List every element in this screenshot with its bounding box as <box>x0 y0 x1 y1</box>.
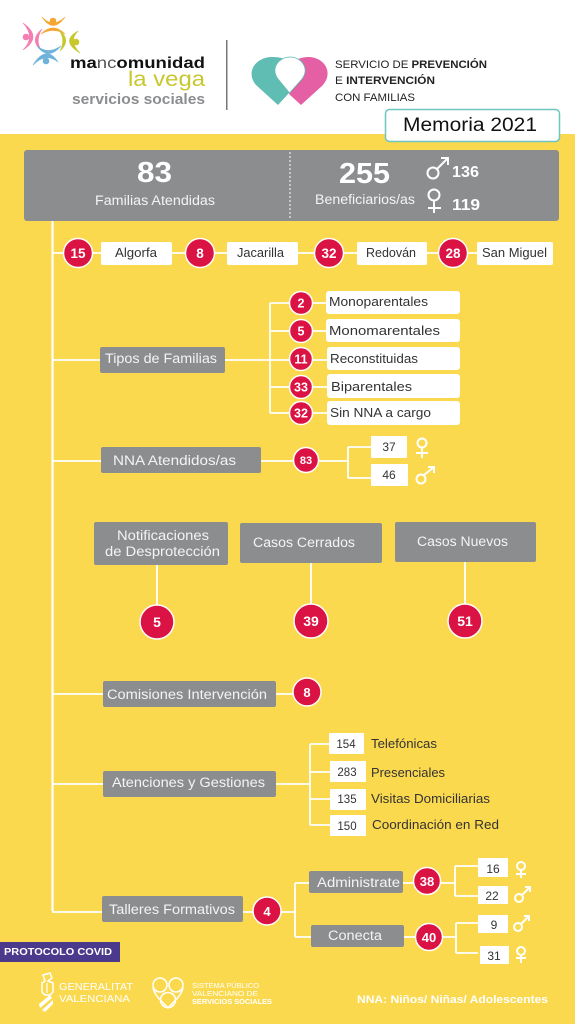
Redovan: 32 <box>321 246 337 261</box>
Sin NNA a cargo: Sin NNA a cargo <box>330 406 431 420</box>
coordinacion: 150 <box>337 821 357 833</box>
stat: female 119: 119 <box>452 197 480 214</box>
text: mancomunidad: ma ncomunidad <box>70 55 205 72</box>
administrate: 38 <box>420 874 434 889</box>
icon: people circle <box>23 17 80 65</box>
logo: hearts <box>252 57 328 105</box>
Biparentales: Biparentales <box>331 380 412 394</box>
logo: sistema publico: VALENCIANO DE <box>192 989 258 998</box>
administrate <box>309 868 440 894</box>
text: la vega: la vega <box>128 68 205 91</box>
visitas: 135 <box>337 794 357 806</box>
Jacarilla: Jacarilla <box>237 246 284 260</box>
stat: beneficiarios <box>315 158 415 207</box>
card: notificaciones: Notificaciones <box>117 528 209 543</box>
section: NNA atendidos: 83 <box>300 455 312 467</box>
card: casos cerrados <box>240 523 382 638</box>
card: casos cerrados: Casos Cerrados <box>253 535 355 550</box>
Monoparentales <box>290 291 460 314</box>
female 37 <box>371 436 428 458</box>
badge: protocolo covid: PROTOCOLO COVID <box>4 946 112 958</box>
stat: familias: 83 <box>137 157 172 189</box>
card: casos nuevos: 51 <box>457 613 473 629</box>
logo: sistema publico: SISTEMA PÚBLICO <box>192 981 259 990</box>
Sin NNA a cargo: 32 <box>294 406 308 420</box>
card: casos nuevos <box>395 522 536 638</box>
section: NNA atendidos: NNA Atendidos/as <box>113 453 236 468</box>
section: talleres: 4 <box>263 904 271 919</box>
Reconstituidas: Reconstituidas <box>330 352 418 366</box>
Monomarentales <box>290 319 460 342</box>
Monomarentales: Monomarentales <box>329 324 440 338</box>
main tree lines <box>52 221 553 953</box>
female 31: 31 <box>487 949 501 963</box>
section: NNA atendidos <box>101 436 434 486</box>
Reconstituidas: 11 <box>294 352 308 366</box>
text: servicios sociales: servicios sociales <box>72 91 205 108</box>
card: notificaciones: 5 <box>153 614 161 630</box>
text: servicio de prevencion: E INTERVENCIÓN <box>335 74 435 87</box>
badge: protocolo covid <box>0 942 120 962</box>
visitas <box>330 789 490 810</box>
presenciales <box>330 761 445 782</box>
badge: memoria 2021: Memoria 2021 <box>403 115 537 136</box>
row: municipalities <box>64 238 553 268</box>
San Miguel <box>438 238 553 268</box>
telefonicas: Telefónicas <box>371 737 437 751</box>
female 37: 37 <box>382 440 396 454</box>
icon: crest <box>39 973 53 1012</box>
section: atenciones <box>103 733 499 836</box>
Algorfa <box>64 238 172 268</box>
visitas: Visitas Domiciliarias <box>371 792 490 806</box>
legend: NNA: NNA: Niños/ Niñas/ Adolescentes <box>357 994 548 1006</box>
section: talleres: Talleres Formativos <box>109 902 235 917</box>
male 22: 22 <box>485 889 499 903</box>
logo: sistema publico: SERVICIOS SOCIALES <box>192 997 272 1006</box>
female 16 <box>478 858 526 878</box>
stat: female 119 <box>428 190 480 214</box>
section: comisiones: 8 <box>303 685 311 700</box>
presenciales: Presenciales <box>371 766 445 780</box>
stat: male 136: 136 <box>452 164 479 181</box>
coordinacion <box>330 815 499 836</box>
coordinacion: Coordinación en Red <box>372 818 499 832</box>
Biparentales: 33 <box>294 380 308 394</box>
logo: generalitat valenciana: GENERALITAT <box>59 981 134 993</box>
stat: familias: Familias Atendidas <box>95 193 215 208</box>
logo: generalitat valenciana: VALENCIANA <box>59 993 130 1005</box>
San Miguel: San Miguel <box>482 246 547 260</box>
logo: sistema publico <box>153 978 272 1008</box>
male 46 <box>371 464 434 486</box>
Biparentales <box>290 374 460 398</box>
administrate: Administrate <box>317 875 400 890</box>
Monomarentales: 5 <box>298 324 305 338</box>
Reconstituidas <box>290 347 460 370</box>
Algorfa: 15 <box>70 246 86 261</box>
text: servicio de prevencion <box>335 58 487 104</box>
conecta: Conecta <box>328 928 383 943</box>
badge: memoria 2021 <box>386 110 560 142</box>
Algorfa: Algorfa <box>115 246 157 260</box>
Monoparentales: Monoparentales <box>329 295 428 309</box>
card: notificaciones <box>94 522 228 639</box>
telefonicas <box>329 733 437 754</box>
Redovan <box>314 238 427 268</box>
card: casos cerrados: 39 <box>303 613 319 629</box>
conecta: 40 <box>422 930 436 945</box>
Monoparentales: 2 <box>298 296 305 310</box>
header background <box>0 0 575 134</box>
presenciales: 283 <box>337 767 357 779</box>
section: atenciones: Atenciones y Gestiones <box>112 775 265 790</box>
male 46: 46 <box>382 468 396 482</box>
section: tipos de familias: Tipos de Familias <box>105 351 217 366</box>
telefonicas: 154 <box>336 739 356 751</box>
section: comisiones <box>103 678 321 707</box>
panel: totals <box>24 150 559 221</box>
female 16: 16 <box>486 862 500 876</box>
card: notificaciones: de Desprotección <box>105 544 220 559</box>
male 9 <box>478 915 529 933</box>
male 9: 9 <box>491 918 498 932</box>
stat: beneficiarios: Beneficiarios/as <box>315 192 415 207</box>
stat: beneficiarios: 255 <box>339 158 390 190</box>
text: servicio de prevencion: CON FAMILIAS <box>335 92 415 104</box>
card: casos nuevos: Casos Nuevos <box>417 534 508 549</box>
Jacarilla: 8 <box>196 246 204 261</box>
section: tipos de familias <box>100 291 460 425</box>
section: comisiones: Comisiones Intervención <box>107 687 267 702</box>
logo: mancomunidad la vega <box>23 17 205 108</box>
Sin NNA a cargo <box>290 401 460 425</box>
Jacarilla <box>186 238 298 268</box>
logo: generalitat valenciana <box>39 973 134 1012</box>
male 22 <box>478 886 530 904</box>
text: servicio de prevencion: SERVICIO DE PREVENCIÓN <box>335 58 487 71</box>
female 31 <box>480 946 526 964</box>
stat: familias <box>95 157 215 208</box>
section: talleres <box>102 858 530 964</box>
Redovan: Redován <box>366 246 416 260</box>
conecta <box>311 924 442 950</box>
stat: male 136 <box>428 158 479 181</box>
San Miguel: 28 <box>445 246 461 261</box>
